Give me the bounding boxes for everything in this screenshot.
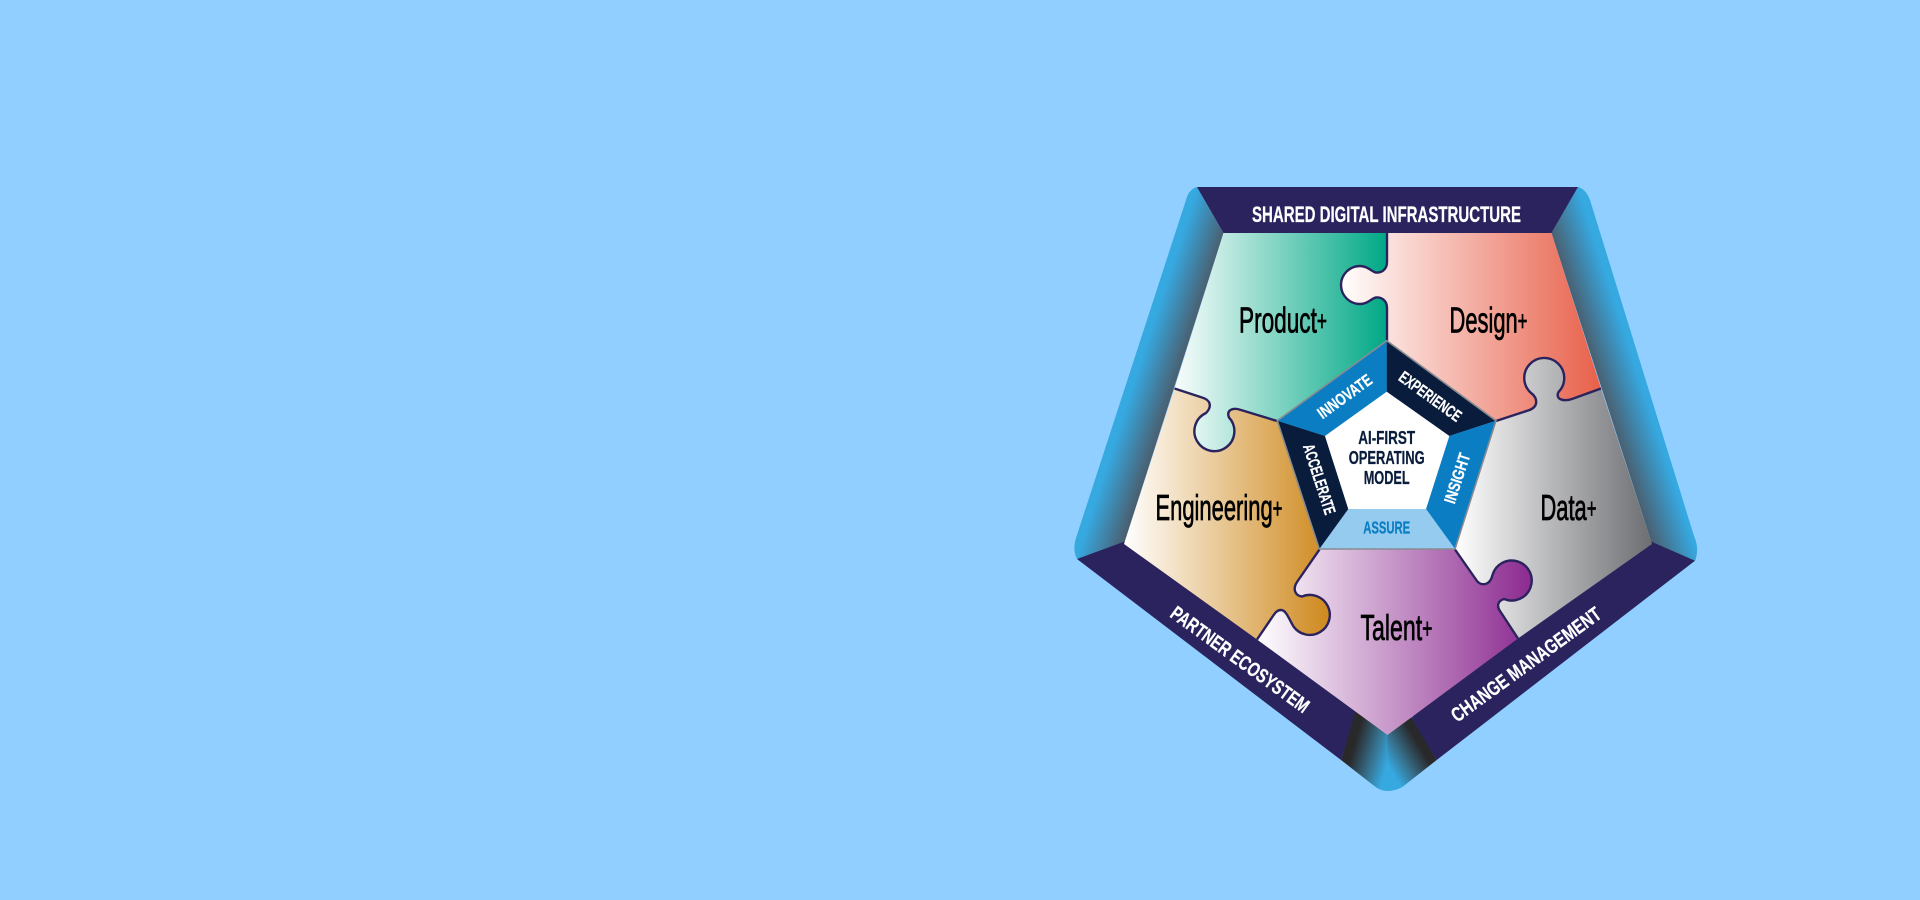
band: shared digital infrastructure: SHARED DIGITAL INFRASTRUCTURE: [1252, 202, 1521, 227]
puzzle piece: data: [1455, 358, 1652, 638]
puzzle piece: data: Data: [1540, 487, 1618, 528]
segment: experience: EXPERIENCE: [1395, 368, 1465, 426]
left side gradient panel: [1074, 187, 1224, 559]
puzzle piece: talent: Talent: [1360, 607, 1458, 648]
puzzle piece: design: [1341, 233, 1601, 421]
band: partner ecosystem: [1077, 541, 1356, 760]
puzzle piece: engineering: [1124, 388, 1330, 640]
puzzle piece: engineering: +: [1273, 493, 1282, 524]
puzzle piece: product: Product: [1239, 300, 1365, 340]
segment: innovate: [1277, 341, 1387, 436]
puzzle piece: design: +: [1518, 306, 1528, 336]
segment: insight: [1426, 421, 1496, 549]
puzzle piece: data: +: [1587, 493, 1596, 524]
band: partner ecosystem: PARTNER ECOSYSTEM: [1166, 602, 1313, 718]
segment: accelerate: ACCELERATE: [1299, 442, 1339, 517]
core: ai-first operating model: OPERATING: [1349, 448, 1425, 468]
bottom gradient wedge: [1341, 711, 1437, 791]
centre pentagon: [1277, 341, 1496, 549]
puzzle piece: talent: +: [1422, 613, 1432, 644]
core: ai-first operating model: MODEL: [1364, 468, 1410, 488]
segment: insight: INSIGHT: [1441, 451, 1474, 506]
puzzle piece: product: [1174, 233, 1387, 451]
segment: experience: [1387, 341, 1496, 436]
band: shared digital infrastructure: [1197, 187, 1578, 233]
right side gradient panel: [1552, 187, 1697, 561]
puzzle piece: engineering: Engineering: [1156, 487, 1350, 528]
core: ai-first operating model: AI-FIRST: [1358, 428, 1415, 448]
segment: innovate: INNOVATE: [1314, 371, 1376, 423]
segment: assure: [1319, 509, 1455, 549]
segment: accelerate: [1277, 421, 1348, 549]
band: change management: CHANGE MANAGEMENT: [1447, 603, 1606, 727]
segment: assure: ASSURE: [1363, 518, 1410, 538]
puzzle divider outlines: [1174, 233, 1601, 640]
puzzle piece: product: +: [1317, 306, 1327, 336]
band: change management: [1412, 541, 1695, 760]
puzzle piece: design: Design: [1450, 300, 1563, 340]
core: ai-first operating model: [1325, 392, 1449, 509]
puzzle piece: talent: [1257, 550, 1532, 735]
